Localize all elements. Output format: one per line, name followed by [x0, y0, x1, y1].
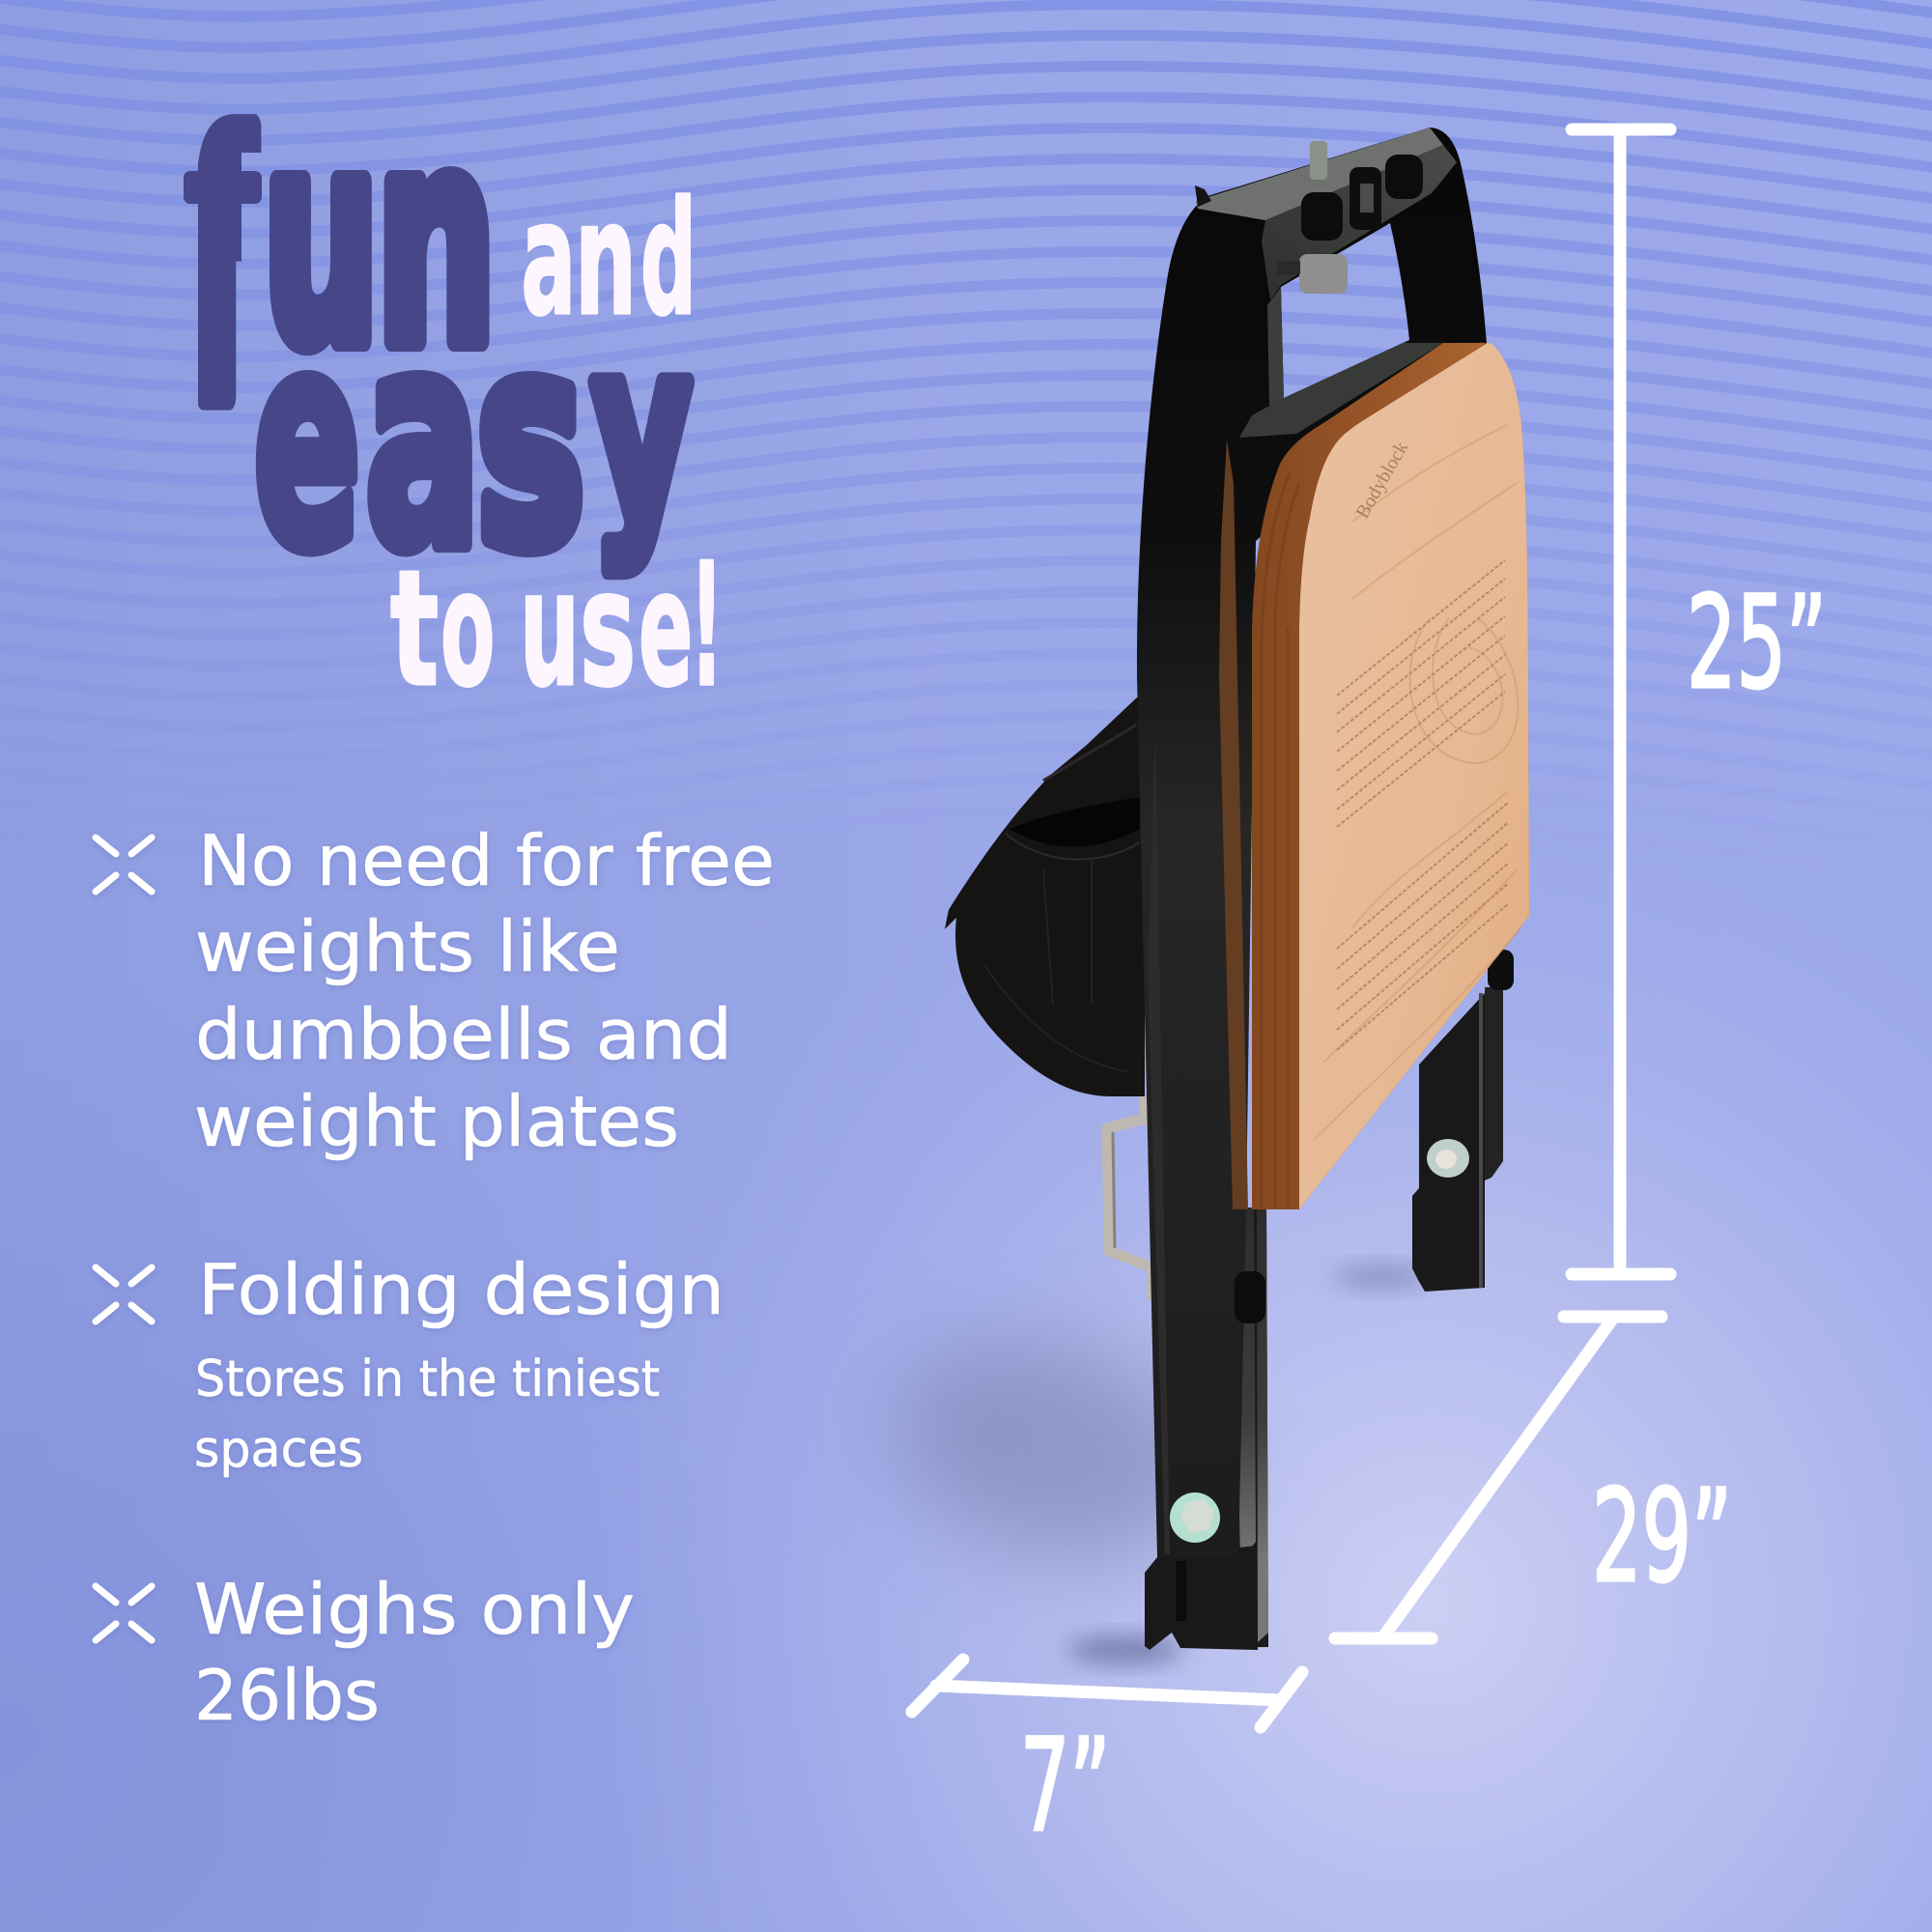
bullet: weight — [96, 1569, 635, 1736]
headline words: to use! — [390, 527, 724, 724]
bullet text: weights like — [195, 906, 620, 987]
depth dimension — [1335, 1317, 1662, 1638]
bullet: folding design — [96, 1249, 724, 1479]
top front face — [1262, 145, 1457, 300]
label: 29 inches: 29” — [1592, 1462, 1732, 1610]
headline word: fun: f — [186, 70, 256, 480]
headline — [184, 114, 714, 688]
silver handle — [1107, 1096, 1151, 1300]
icon: x marker — [96, 1586, 152, 1640]
top surface — [1196, 128, 1443, 220]
knurled knob — [1299, 254, 1348, 294]
wood edge grain — [1262, 473, 1299, 1208]
height dimension — [1572, 129, 1670, 1274]
headline word: and — [522, 167, 696, 351]
headline word: easy: s — [477, 278, 584, 611]
brand mark: Bodyblock — [1351, 438, 1412, 522]
bullet text — [194, 1249, 724, 1479]
icon: x marker — [96, 1267, 152, 1321]
dimension lines — [912, 129, 1670, 1727]
bullet text: Stores in the tiniest — [195, 1350, 660, 1408]
headline word: easy: a — [365, 270, 480, 613]
headline word: easy — [254, 270, 692, 613]
label: 25 inches: 25” — [1687, 568, 1827, 717]
front leg knob — [1235, 1271, 1265, 1323]
wood seat — [1252, 343, 1529, 1209]
bullet text: dumbbells and — [195, 994, 732, 1075]
headline words: to use!: ! — [690, 527, 724, 724]
rear leg — [1412, 950, 1514, 1292]
bag — [945, 697, 1145, 1096]
wood grain — [1314, 425, 1521, 1140]
bullet text: Weighs only — [194, 1569, 635, 1650]
headline word: and: n — [575, 167, 637, 350]
headline words: to use!: s — [580, 537, 636, 723]
headline word: and: d — [640, 169, 696, 351]
metal frame — [1137, 128, 1487, 1558]
bullet text: spaces — [194, 1421, 363, 1479]
bullet text — [194, 820, 775, 1162]
engraved grooves — [1337, 560, 1509, 1050]
headline words: to use!: u — [520, 538, 580, 723]
width dimension — [912, 1660, 1302, 1727]
rear knob — [1488, 950, 1514, 990]
headline word: easy: e — [254, 270, 360, 613]
bullet text — [194, 1569, 635, 1736]
headline words: to use!: e — [639, 536, 693, 722]
lower inner leg — [1188, 1208, 1268, 1648]
headline word: fun — [184, 114, 490, 411]
front bolt — [1170, 1492, 1220, 1543]
rear bolt — [1427, 1139, 1469, 1178]
headline word: easy: y — [592, 289, 692, 576]
bullet text: Folding design — [198, 1249, 724, 1330]
frame hardware — [1195, 141, 1423, 294]
floor shadows — [867, 1265, 1430, 1663]
lower bracket plate — [1239, 343, 1443, 438]
headline words: to use!: t — [390, 536, 439, 722]
bullet: no free weights — [96, 820, 775, 1162]
foot — [1145, 1546, 1258, 1650]
bullet text: 26lbs — [194, 1655, 380, 1736]
frame highlight — [1148, 734, 1170, 1554]
icon: x marker — [96, 838, 152, 892]
bullet text: No need for free — [198, 820, 775, 901]
label: 7 inches: 7” — [1020, 1711, 1110, 1860]
headline words: to use!: o — [440, 536, 495, 722]
wood back strip — [1219, 440, 1248, 1209]
product: folded reformer — [945, 128, 1529, 1650]
headline word: and: a — [522, 169, 576, 351]
bullet text: weight plates — [194, 1081, 679, 1162]
headline word: fun: u — [264, 71, 379, 410]
headline word: fun: n — [377, 71, 496, 409]
